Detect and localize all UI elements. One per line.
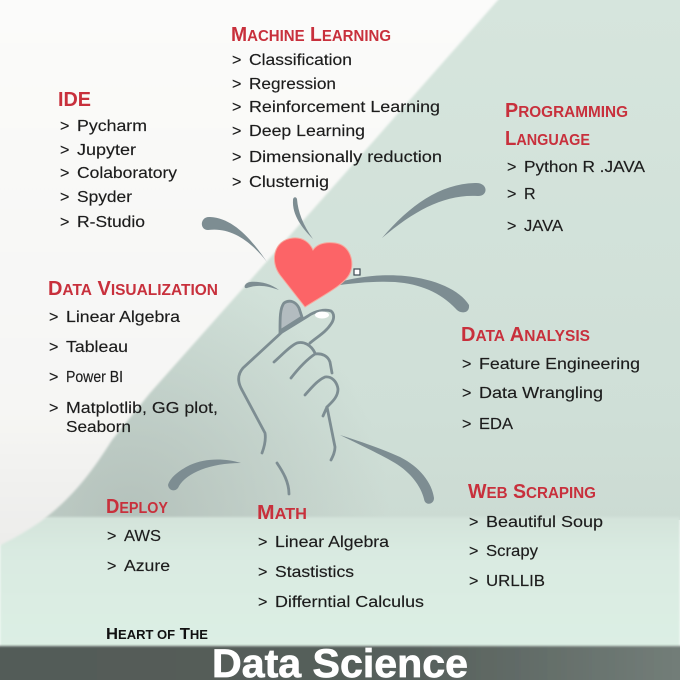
heading: Programming Language: PROGRAMMING: [505, 100, 628, 122]
swoosh lines around the heart: [168, 183, 486, 504]
list: Math items: Linear Algebra: [275, 534, 389, 551]
list: Machine Learning items: >: [232, 76, 241, 93]
list: Data Visualization items: [49, 309, 218, 436]
list: Programming Language items: R: [524, 186, 536, 203]
list: Data Analysis items: [462, 356, 640, 433]
list: Data Analysis items: >: [462, 416, 471, 433]
list: Machine Learning items: >: [232, 99, 241, 116]
heading: Programming Language: [505, 100, 628, 150]
heading: IDE: IDE: [58, 89, 91, 111]
list: IDE items: >: [60, 189, 69, 206]
section: Machine Learning: [231, 24, 442, 191]
list: Deploy items: Azure: [124, 558, 170, 575]
list: Data Analysis items: >: [462, 385, 471, 402]
list: Math items: >: [258, 594, 267, 611]
list: Web Scraping items: Scrapy: [486, 543, 538, 560]
small diamond handle: [354, 269, 360, 275]
list: IDE items: >: [60, 165, 69, 182]
list: Data Analysis items: Data Wrangling: [479, 385, 603, 402]
list: Machine Learning items: Clusternig: [249, 174, 329, 191]
heading: Web Scraping: WEB SCRAPING: [468, 481, 596, 503]
list: Math items: Stastistics: [275, 564, 354, 581]
hand thumb: [280, 301, 302, 331]
list: Data Visualization items: Tableau: [66, 339, 128, 356]
section: Deploy: [106, 496, 170, 575]
list: Data Visualization items: Matplotlib, GG plot,: [66, 400, 218, 417]
background white diagonal: [0, 0, 506, 550]
list: Data Analysis items: >: [462, 356, 471, 373]
heading: Math: MATH: [257, 502, 307, 524]
list: IDE items: >: [60, 118, 69, 135]
list: IDE items: [60, 118, 177, 231]
background floor: [0, 517, 680, 647]
list: Programming Language items: JAVA: [524, 218, 563, 235]
list: Deploy items: >: [107, 558, 116, 575]
illustration: hand with heart: [168, 183, 486, 504]
section: IDE: [58, 89, 177, 231]
list: Machine Learning items: Dimensionally reduction: [249, 149, 442, 166]
list: Programming Language items: >: [507, 218, 516, 235]
list: Math items: Differntial Calculus: [275, 594, 424, 611]
list: Machine Learning items: Regression: [249, 76, 336, 93]
section: Math: [257, 502, 424, 611]
list: Web Scraping items: URLLIB: [486, 573, 545, 590]
list: IDE items: >: [60, 214, 69, 231]
list: Programming Language items: >: [507, 159, 516, 176]
list: Math items: >: [258, 534, 267, 551]
background wall: [0, 0, 680, 520]
list: Data Visualization items: >: [49, 369, 58, 386]
list: Math items: [258, 534, 424, 611]
label: Heart of the: HEART OF THE: [106, 626, 208, 643]
list: Machine Learning items: >: [232, 149, 241, 166]
list: Web Scraping items: >: [469, 543, 478, 560]
bottom band: [0, 646, 680, 680]
list: Data Analysis items: Feature Engineering: [479, 356, 640, 373]
list: IDE items: >: [60, 142, 69, 159]
list: IDE items: R-Studio: [77, 214, 145, 231]
list: Machine Learning items: Reinforcement Learning: [249, 99, 440, 116]
section: Data Visualization: [48, 278, 218, 436]
list: Data Visualization items: >: [49, 309, 58, 326]
list: Deploy items: >: [107, 528, 116, 545]
list: Data Visualization items: Linear Algebra: [66, 309, 180, 326]
list: Machine Learning items: >: [232, 123, 241, 140]
list: Data Visualization items: Seaborn: [66, 419, 131, 436]
section: Data Analysis: [461, 324, 640, 433]
list: Programming Language items: [507, 159, 645, 235]
list: Machine Learning items: [232, 52, 442, 191]
list: Machine Learning items: Classification: [249, 52, 352, 69]
list: IDE items: Pycharm: [77, 118, 147, 135]
background wall shadow: [0, 258, 400, 518]
list: Programming Language items: >: [507, 186, 516, 203]
section: Web Scraping: [468, 481, 603, 590]
list: Machine Learning items: >: [232, 174, 241, 191]
heading: Machine Learning: MACHINE LEARNING: [231, 24, 391, 46]
list: IDE items: Spyder: [77, 189, 133, 206]
heading: Data Analysis: DATA ANALYSIS: [461, 324, 590, 346]
list: Math items: >: [258, 564, 267, 581]
heart: [274, 238, 352, 307]
list: Data Visualization items: >: [49, 339, 58, 356]
list: IDE items: Colaboratory: [77, 165, 177, 182]
heading: Deploy: DEPLOY: [106, 496, 169, 518]
hand outline: [239, 310, 338, 494]
list: Programming Language items: Python R .JAVA: [524, 159, 645, 176]
list: IDE items: Jupyter: [77, 142, 137, 159]
list: Data Analysis items: EDA: [479, 416, 513, 433]
heading: Data Visualization: DATA VISUALIZATION: [48, 278, 218, 300]
list: Web Scraping items: >: [469, 514, 478, 531]
fingernail: [315, 312, 329, 318]
section: Programming Language: [505, 100, 645, 235]
heading: Programming Language: LANGUAGE: [505, 128, 590, 150]
list: Web Scraping items: >: [469, 573, 478, 590]
list: Deploy items: AWS: [124, 528, 161, 545]
list: Machine Learning items: Deep Learning: [249, 123, 365, 140]
list: Data Visualization items: >: [49, 400, 58, 417]
list: Machine Learning items: >: [232, 52, 241, 69]
list: Web Scraping items: Beautiful Soup: [486, 514, 603, 531]
list: Data Visualization items: Power BI: [66, 369, 123, 386]
list: Web Scraping items: [469, 514, 603, 590]
list: Deploy items: [107, 528, 170, 575]
